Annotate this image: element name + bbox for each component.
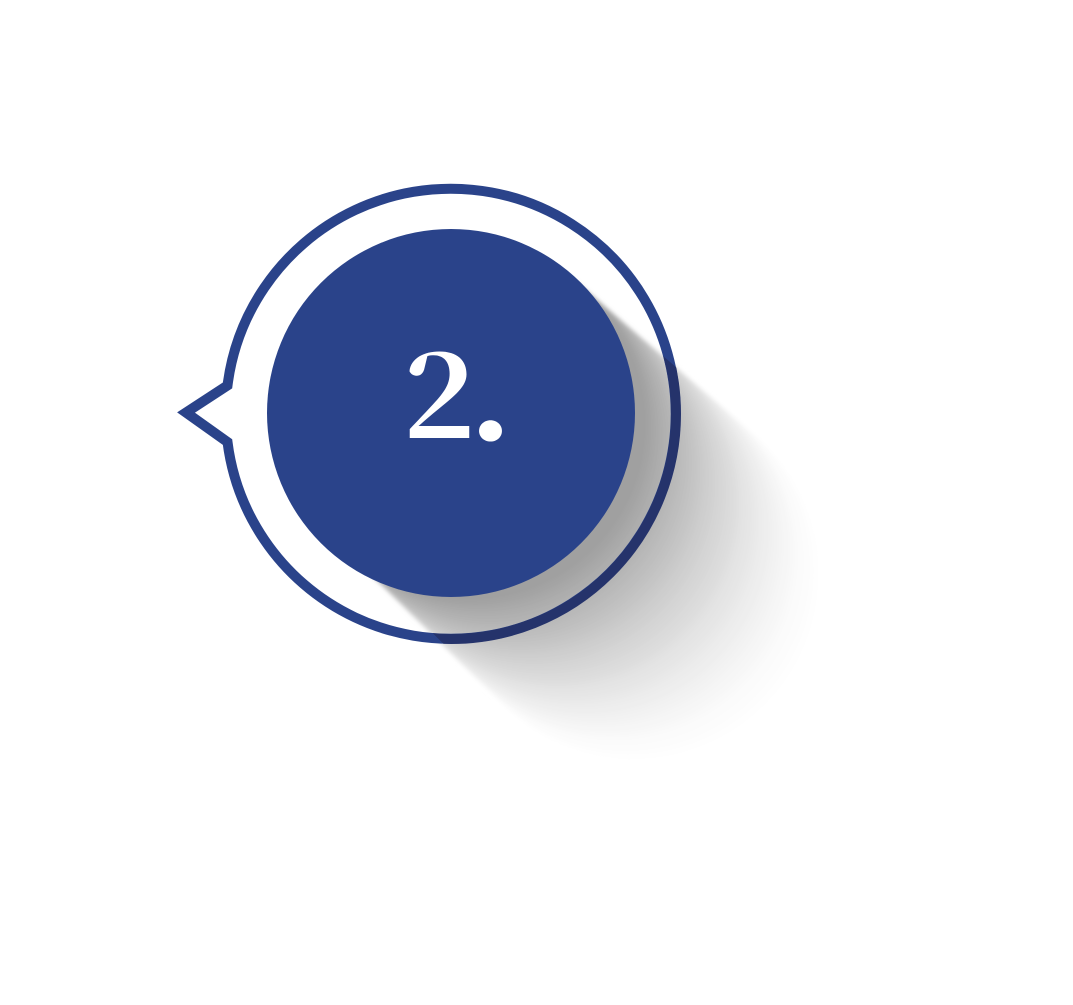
number label: . [467,290,514,477]
badge graphic with long shadow [177,184,788,731]
inner filled circle [267,229,635,597]
speech bubble ring with pointer [186,189,676,639]
ring section darkened by shadow [433,356,681,644]
long drop shadow [294,247,825,765]
number label: 2 [402,306,475,471]
